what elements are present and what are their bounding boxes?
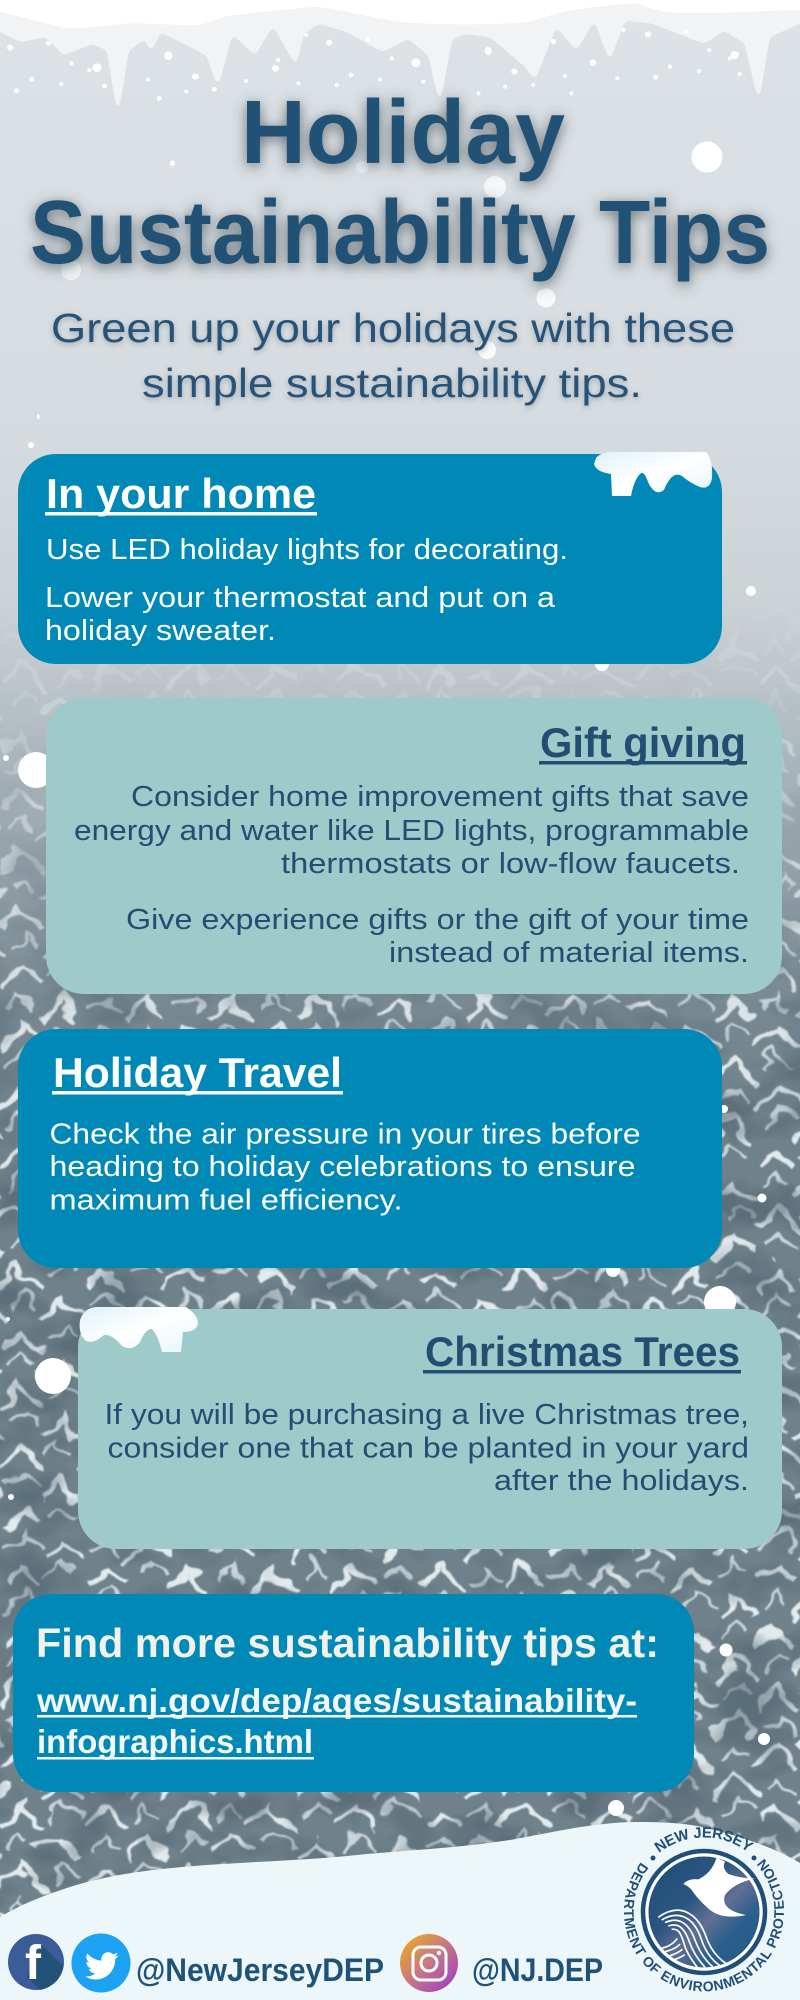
social handle: nj dep: @NJ.DEP [472,1952,603,1988]
subtitle: Green up your holidays with these [51,305,735,351]
subtitle [51,305,735,406]
title: Holiday [241,83,565,183]
icicles at top of page [0,0,800,115]
body text: holiday travel: heading to holiday celebrations to ensure [50,1151,636,1183]
body text: gift giving: thermostats or low-flow faucets. [281,848,740,880]
logo: new jersey department of environmental protection seal [624,1827,784,1992]
seal disc [648,1856,760,1968]
body text: in your home [45,534,568,647]
body text: christmas trees: after the holidays. [494,1465,749,1497]
heading: holiday travel: Holiday Travel [53,1049,342,1096]
heading: find more tips: Find more sustainability tips at: [36,1620,659,1666]
body text: holiday travel: Check the air pressure in your tires before [50,1118,640,1150]
heading: christmas trees: Christmas Trees [425,1328,740,1375]
body text: in your home: holiday sweater. [45,615,276,647]
seal text: department: DEPARTMENT OF ENVIRONMENTAL PROTECTION [624,1858,784,1992]
falling snow: small flakes [7,28,742,419]
panel: find more tips [13,1594,694,1792]
icon: facebook: f [25,1937,42,1990]
body text: christmas trees: consider one that can be planted in your yard [108,1432,749,1464]
social handle: new jersey dep: @NewJerseyDEP [136,1952,384,1988]
panel: in your home [18,452,722,664]
body text: gift giving [74,781,749,969]
seal separator dots [650,1856,756,1860]
body text: gift giving: instead of material items. [389,937,749,969]
icon: facebook [8,1934,64,1990]
link: sustainability infographics [36,1682,637,1760]
icon: instagram [400,1934,458,1992]
heading: gift giving: Gift giving [540,719,746,766]
body text: christmas trees [104,1399,749,1497]
heading: in your home: In your home [46,470,316,517]
body text: gift giving: Give experience gifts or the gift of your time [126,904,749,936]
title: Sustainability Tips [30,183,770,283]
background: snowy forest [0,657,800,1917]
seal dove and wave [658,1858,755,1967]
body text: gift giving: energy and water like LED lights, programmable [74,815,749,847]
body text: in your home: Use LED holiday lights for decorating. [46,534,568,566]
panel: christmas trees [78,1307,782,1549]
panel: holiday travel [18,1029,722,1268]
icon: snow cap [594,452,712,496]
footer snow drift [0,1822,800,2000]
subtitle: simple sustainability tips. [142,360,642,406]
title [30,83,770,283]
body text: holiday travel [50,1118,640,1216]
body text: holiday travel: maximum fuel efficiency. [50,1184,402,1216]
link: sustainability infographics: infographics.html [37,1723,313,1760]
body text: christmas trees: If you will be purchasing a live Christmas tree, [104,1399,749,1431]
seal ring [643,1851,765,1973]
seal text: new jersey: NEW JERSEY [654,1827,754,1852]
panel: gift giving [46,698,782,994]
icon: twitter [72,1934,130,1992]
icon: snow cap [80,1307,198,1352]
body text: gift giving: Consider home improvement gifts that save [131,781,749,813]
link: sustainability infographics: www.nj.gov/dep/aqes/sustainability- [36,1682,637,1719]
body text: in your home: Lower your thermostat and put on a [45,582,556,614]
